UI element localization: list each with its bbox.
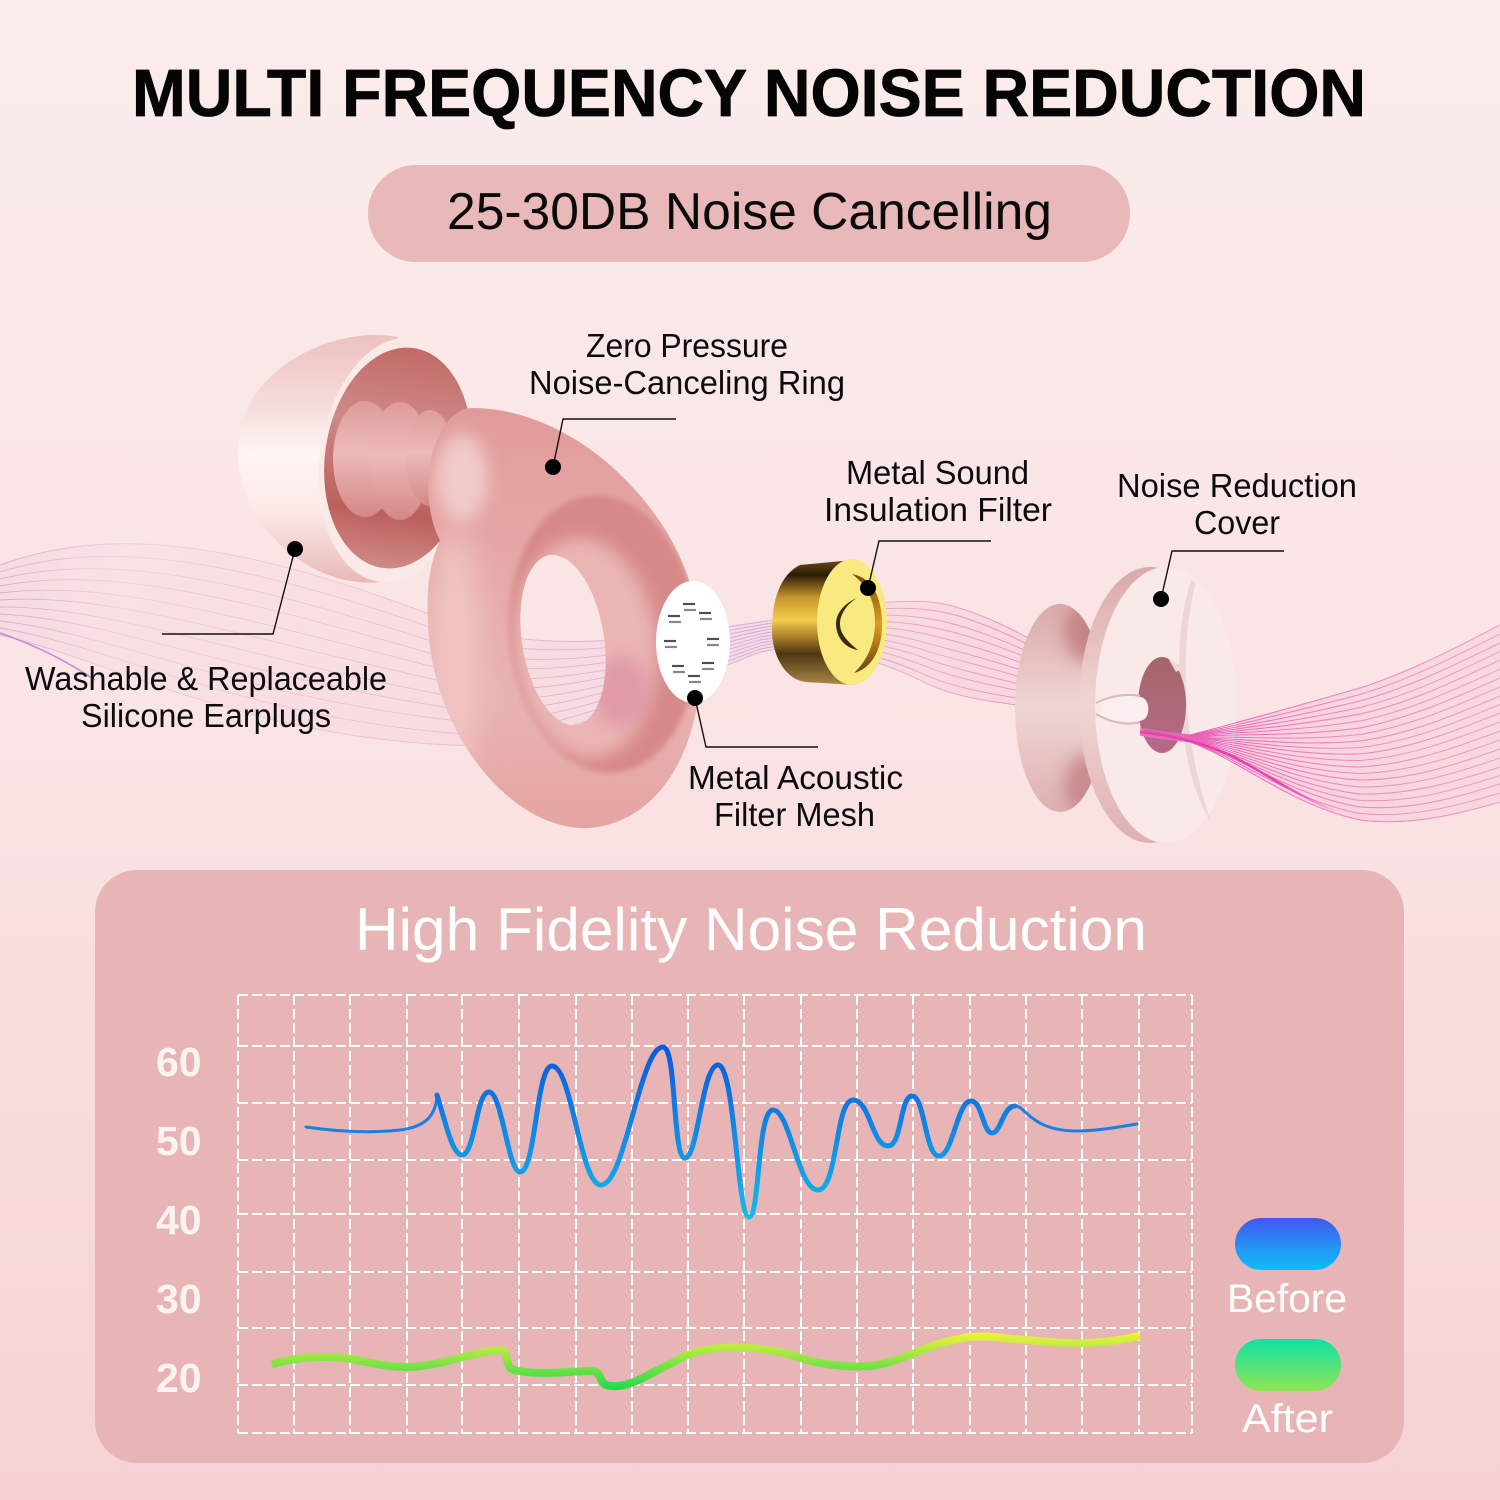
legend: before	[1227, 1218, 1347, 1321]
callout: noise reduction cover: Cover	[1194, 504, 1280, 541]
dome cavity	[310, 338, 486, 578]
cover center hole	[1138, 657, 1186, 753]
panel heading: High Fidelity Noise Reduction	[355, 896, 1147, 963]
sound wave passing through cover	[1140, 625, 1500, 822]
callout: noise reduction cover	[1117, 467, 1357, 607]
callout: washable replaceable silicone earplugs: Silicone Earplugs	[81, 697, 331, 734]
callout: washable replaceable silicone earplugs	[25, 541, 387, 734]
y axis labels: 30	[156, 1276, 202, 1322]
y axis labels: 40	[156, 1197, 202, 1243]
silicone stem lobes	[333, 401, 454, 520]
legend: after	[1235, 1339, 1341, 1441]
y axis labels: 50	[156, 1118, 202, 1164]
callout: zero pressure noise-canceling ring: Zero Pressure	[586, 327, 788, 364]
callout: washable replaceable silicone earplugs: Washable & Replaceable	[25, 660, 387, 697]
subtitle pill: 25-30DB Noise Cancelling	[447, 183, 1052, 241]
subtitle pill	[368, 165, 1130, 262]
panel: high fidelity noise reduction	[95, 870, 1404, 1463]
callout: metal acoustic filter mesh: Metal Acoustic	[688, 759, 903, 796]
dome opening rim	[304, 328, 488, 592]
before noise curve	[306, 1047, 1137, 1217]
callout: metal sound insulation filter: Insulation Filter	[824, 491, 1052, 528]
after noise curve	[272, 1336, 1140, 1386]
legend: after: After	[1242, 1397, 1333, 1441]
y axis labels: 60	[156, 1039, 202, 1085]
y axis labels	[156, 1039, 202, 1401]
noise reduction cover	[1015, 567, 1237, 843]
chart grid	[238, 995, 1192, 1433]
callout: metal sound insulation filter	[824, 454, 1052, 596]
callout: zero pressure noise-canceling ring: Noise-Canceling Ring	[529, 364, 845, 401]
legend: before: Before	[1227, 1277, 1347, 1321]
ear tip dome	[238, 334, 468, 583]
loop ring body	[428, 408, 709, 828]
callout: zero pressure noise-canceling ring	[529, 327, 845, 475]
title: MULTI FREQUENCY NOISE REDUCTION	[132, 56, 1366, 131]
y axis labels: 20	[156, 1355, 202, 1401]
callout: metal acoustic filter mesh: Filter Mesh	[714, 796, 875, 833]
sound wave lines	[0, 544, 1500, 822]
metal acoustic filter mesh	[656, 581, 730, 703]
cover slot	[1096, 695, 1148, 724]
callout: metal acoustic filter mesh	[687, 690, 903, 833]
metal sound insulation filter	[772, 559, 887, 685]
callout: metal sound insulation filter: Metal Sound	[846, 454, 1029, 491]
callout: noise reduction cover: Noise Reduction	[1117, 467, 1357, 504]
